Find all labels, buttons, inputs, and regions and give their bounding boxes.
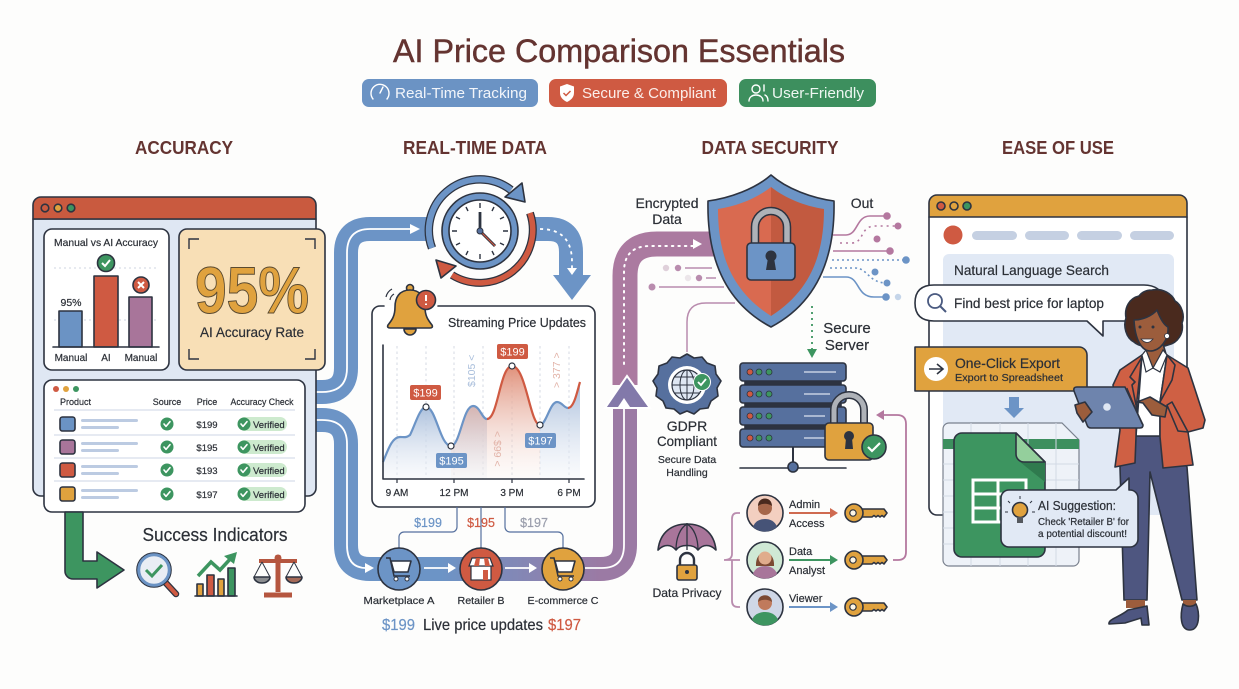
label: secure server: Secure xyxy=(823,320,871,337)
table: product accuracy check: Accuracy Check xyxy=(230,397,294,407)
label: GDPR compliant: GDPR xyxy=(667,418,707,434)
icon: e-commerce C cart xyxy=(542,548,584,590)
axis labels: 9 AM xyxy=(386,488,408,499)
heading: success indicators: Success Indicators xyxy=(142,525,288,545)
bracket: access roles xyxy=(724,513,740,607)
label: GDPR compliant: Handling xyxy=(666,467,708,479)
row: $193: Verified xyxy=(253,466,285,477)
arrow: down to spreadsheet xyxy=(1004,397,1024,418)
label: encrypted data: Encrypted xyxy=(636,195,698,211)
connectors to retailers xyxy=(399,507,563,548)
tablet xyxy=(1074,387,1143,428)
label: GDPR compliant xyxy=(657,418,717,479)
callout: AI suggestion xyxy=(1001,478,1138,547)
label: secure server: Server xyxy=(825,337,869,354)
shoes xyxy=(1109,600,1198,630)
person with tablet xyxy=(1074,290,1205,630)
role: admin access xyxy=(747,495,887,532)
rotated delta labels xyxy=(466,352,563,467)
line chart: price curve xyxy=(383,363,580,479)
icon: balance scale xyxy=(254,554,302,595)
row: $197: $197 xyxy=(196,490,218,501)
price label: $197: $197 xyxy=(528,436,553,448)
arrow: purple flow into shield xyxy=(605,239,720,408)
arrow: keys back to server xyxy=(876,410,906,560)
rotated delta labels: < $99 < xyxy=(491,431,503,467)
row: $199: Verified xyxy=(253,420,285,431)
label: GDPR compliant: Compliant xyxy=(657,433,717,449)
heading: accuracy: ACCURACY xyxy=(135,137,234,158)
callout: AI suggestion: Check 'Retailer B' for xyxy=(1038,517,1130,528)
retailer labels xyxy=(364,595,599,607)
price label: peak $199: $199 xyxy=(500,346,525,358)
shirt xyxy=(1136,355,1167,436)
button: one-click export: One-Click Export xyxy=(955,355,1060,371)
row: $193: $193 xyxy=(196,466,218,477)
badge: secure and compliant xyxy=(549,79,727,107)
badge: user-friendly: User-Friendly xyxy=(772,85,865,102)
search speech bubble xyxy=(915,285,1166,336)
table: product accuracy check: Source xyxy=(153,397,181,407)
data input lines xyxy=(648,265,724,290)
table: product accuracy check: Product xyxy=(60,397,92,407)
connector prices: $195 xyxy=(467,516,495,530)
icon: alert bell xyxy=(386,284,436,335)
label: encrypted data: Data xyxy=(652,211,682,227)
live price updates caption: $199 xyxy=(382,617,415,634)
icon: marketplace A cart xyxy=(378,548,420,590)
search speech bubble: Find best price for laptop xyxy=(954,295,1104,311)
row: $197: Verified xyxy=(253,490,285,501)
label: out: Out xyxy=(851,195,873,211)
icon: growth chart xyxy=(195,552,237,596)
role: viewer: Viewer xyxy=(789,593,823,605)
row: $197 xyxy=(60,487,287,501)
axis labels: 12 PM xyxy=(440,488,468,499)
hands xyxy=(1075,402,1092,422)
head and hair xyxy=(1125,290,1183,372)
role: admin access: Admin xyxy=(789,499,820,511)
role: admin access: Access xyxy=(789,518,825,530)
row: $195: $195 xyxy=(196,443,218,454)
badge: real-time tracking xyxy=(362,79,538,107)
icon: retailer B store xyxy=(460,548,502,590)
heading: data security: DATA SECURITY xyxy=(702,137,839,158)
arrow: green to success indicators xyxy=(65,512,124,588)
icon: clock with cycle arrows xyxy=(429,179,533,283)
chart card: streaming price updates xyxy=(372,306,595,507)
icon: server stack xyxy=(740,363,846,472)
button: one-click export xyxy=(915,347,1087,391)
title: AI Price Comparison Essentials xyxy=(393,33,845,69)
icon: lightbulb xyxy=(1005,496,1035,523)
axis labels: 6 PM xyxy=(557,488,581,499)
browser window xyxy=(33,197,316,496)
badge: user-friendly xyxy=(739,79,876,107)
role: data analyst: Analyst xyxy=(789,565,825,577)
button: one-click export: Export to Spreadsheet xyxy=(955,372,1063,384)
callout: 95% AI accuracy rate: 95% xyxy=(195,253,309,327)
row: $199 xyxy=(60,417,287,431)
heading: streaming price updates: Streaming Price Updates xyxy=(448,316,586,330)
heading: ease of use: EASE OF USE xyxy=(1002,137,1114,158)
role: viewer xyxy=(747,589,887,626)
price label: $195: $195 xyxy=(439,456,464,468)
connector prices: $197 xyxy=(520,516,548,530)
trousers xyxy=(1120,436,1197,600)
icon: spreadsheet xyxy=(943,423,1079,566)
bar chart: manual vs AI accuracy: AI xyxy=(101,353,111,364)
panel: ease of use xyxy=(915,195,1205,630)
panel: data security xyxy=(636,175,910,626)
rotated delta labels: $105 < xyxy=(466,355,478,387)
table: product accuracy check xyxy=(44,380,305,512)
role: data analyst: Data xyxy=(789,546,813,558)
price label: $199: $199 xyxy=(413,388,438,400)
badge: secure and compliant: Secure & Compliant xyxy=(582,85,717,102)
retailer labels: E-commerce C xyxy=(528,595,599,607)
bar chart: manual vs AI accuracy xyxy=(44,229,169,370)
price label: peak $199 xyxy=(497,344,528,359)
connector prices: $199 xyxy=(414,516,442,530)
label: GDPR compliant: Secure Data xyxy=(658,454,716,466)
icon: gold padlock with check xyxy=(825,395,886,460)
arrow: blue flow to clock and chart xyxy=(310,224,591,392)
bar chart: manual vs AI accuracy: 95% xyxy=(60,297,82,309)
blazer xyxy=(1113,355,1205,468)
axis labels: 3 PM xyxy=(500,488,524,499)
callout: AI suggestion: a potential discount! xyxy=(1038,529,1127,540)
bar chart: manual vs AI accuracy: Manual xyxy=(125,353,157,364)
bar chart: manual vs AI accuracy: Manual xyxy=(55,353,87,364)
callout: AI suggestion: AI Suggestion: xyxy=(1038,499,1116,513)
price label: $199 xyxy=(410,385,441,400)
row: $199: $199 xyxy=(196,420,218,431)
row: $195: Verified xyxy=(253,443,285,454)
role: data analyst xyxy=(747,542,887,579)
live price updates caption: $197 xyxy=(548,617,581,634)
callout: 95% AI accuracy rate: AI Accuracy Rate xyxy=(200,324,304,340)
connector prices xyxy=(414,516,548,530)
icon: magnifier with check xyxy=(137,553,176,594)
badge: real-time tracking: Real-Time Tracking xyxy=(395,85,527,102)
panel: real-time data xyxy=(364,179,599,634)
arrow: blue to purple flow through retailers xyxy=(310,400,625,573)
live price updates caption: Live price updates xyxy=(423,617,543,634)
row: $193 xyxy=(60,463,287,477)
live price updates caption xyxy=(382,617,581,634)
axis labels xyxy=(386,488,581,499)
heading: real-time data: REAL-TIME DATA xyxy=(403,137,547,158)
callout: 95% AI accuracy rate xyxy=(179,229,325,370)
row: $195 xyxy=(60,440,287,454)
icon: GDPR badge xyxy=(653,354,721,414)
heading: natural language search: Natural Language Search xyxy=(954,262,1109,278)
label: secure server xyxy=(823,320,871,354)
price label: $195 xyxy=(436,453,467,468)
icon: umbrella with lock xyxy=(658,523,716,580)
label: data privacy: Data Privacy xyxy=(652,586,722,600)
connector: shield to GDPR xyxy=(687,303,735,352)
browser window xyxy=(929,195,1187,515)
retailer labels: Retailer B xyxy=(458,595,504,607)
table: product accuracy check: Price xyxy=(197,397,217,407)
arrow: dotted to server xyxy=(807,306,817,358)
retailer labels: Marketplace A xyxy=(364,595,434,607)
data output lines xyxy=(823,212,910,301)
panel: accuracy xyxy=(33,197,325,596)
price label: $197 xyxy=(525,433,556,448)
icon: security shield xyxy=(708,175,834,327)
rotated delta labels: > 377 > xyxy=(551,352,563,388)
bar chart: manual vs AI accuracy: Manual vs AI Accuracy xyxy=(54,237,159,249)
label: encrypted data xyxy=(636,195,698,227)
